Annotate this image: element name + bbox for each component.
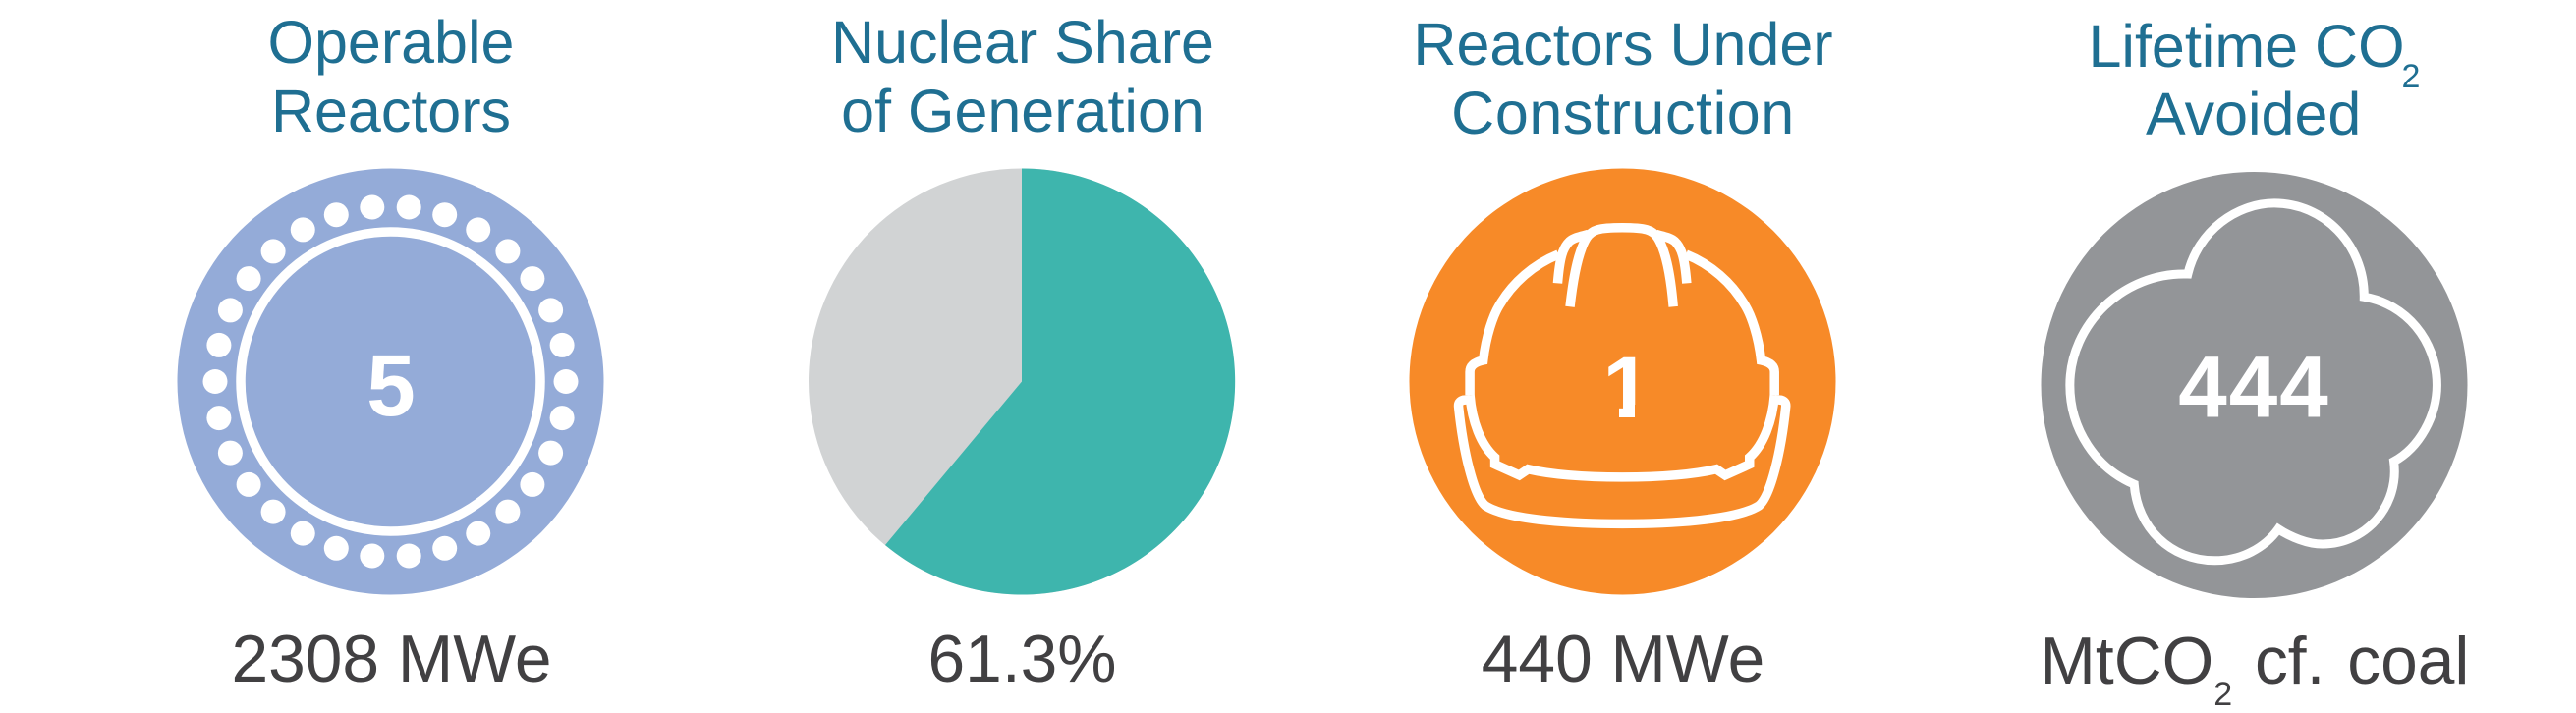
heading: reactors under construction: Construction — [1451, 80, 1795, 146]
heading: reactors under construction: Reactors Under — [1413, 11, 1833, 78]
value: construction capacity: 440 MWe — [1482, 623, 1764, 696]
heading: lifetime CO2 avoided: Lifetime CO — [2089, 13, 2405, 80]
heading: nuclear share of generation: of Generation — [841, 78, 1204, 144]
value: CO2 unit: cf. coal — [2232, 625, 2469, 698]
value: CO2 unit: MtCO — [2040, 625, 2213, 698]
number: operable reactors: 5 — [366, 336, 416, 434]
panel: operable reactors — [177, 9, 603, 696]
heading: operable reactors: Operable — [268, 9, 514, 76]
value: operable capacity: 2308 MWe — [231, 623, 552, 696]
panel: reactors under construction — [1409, 11, 1835, 696]
number: reactors under construction: 1 — [1602, 338, 1652, 436]
heading: lifetime CO2 avoided: Avoided — [2146, 81, 2361, 147]
heading: lifetime CO2 avoided: 2 — [2402, 58, 2420, 95]
value: CO2 unit: 2 — [2213, 676, 2232, 713]
heading: operable reactors: Reactors — [271, 78, 511, 144]
number: CO2 avoided: 444 — [2178, 338, 2330, 436]
panel: nuclear share of generation — [809, 9, 1235, 696]
icon: cloud circle — [2042, 172, 2468, 598]
panel: lifetime CO2 avoided — [2040, 13, 2469, 713]
value: nuclear share: 61.3% — [928, 623, 1116, 696]
icon: hard hat circle — [1409, 169, 1835, 595]
pie chart: 61.3 percent — [809, 168, 1235, 595]
icon: reactor core circle — [177, 169, 603, 595]
heading: nuclear share of generation: Nuclear Share — [831, 9, 1214, 76]
